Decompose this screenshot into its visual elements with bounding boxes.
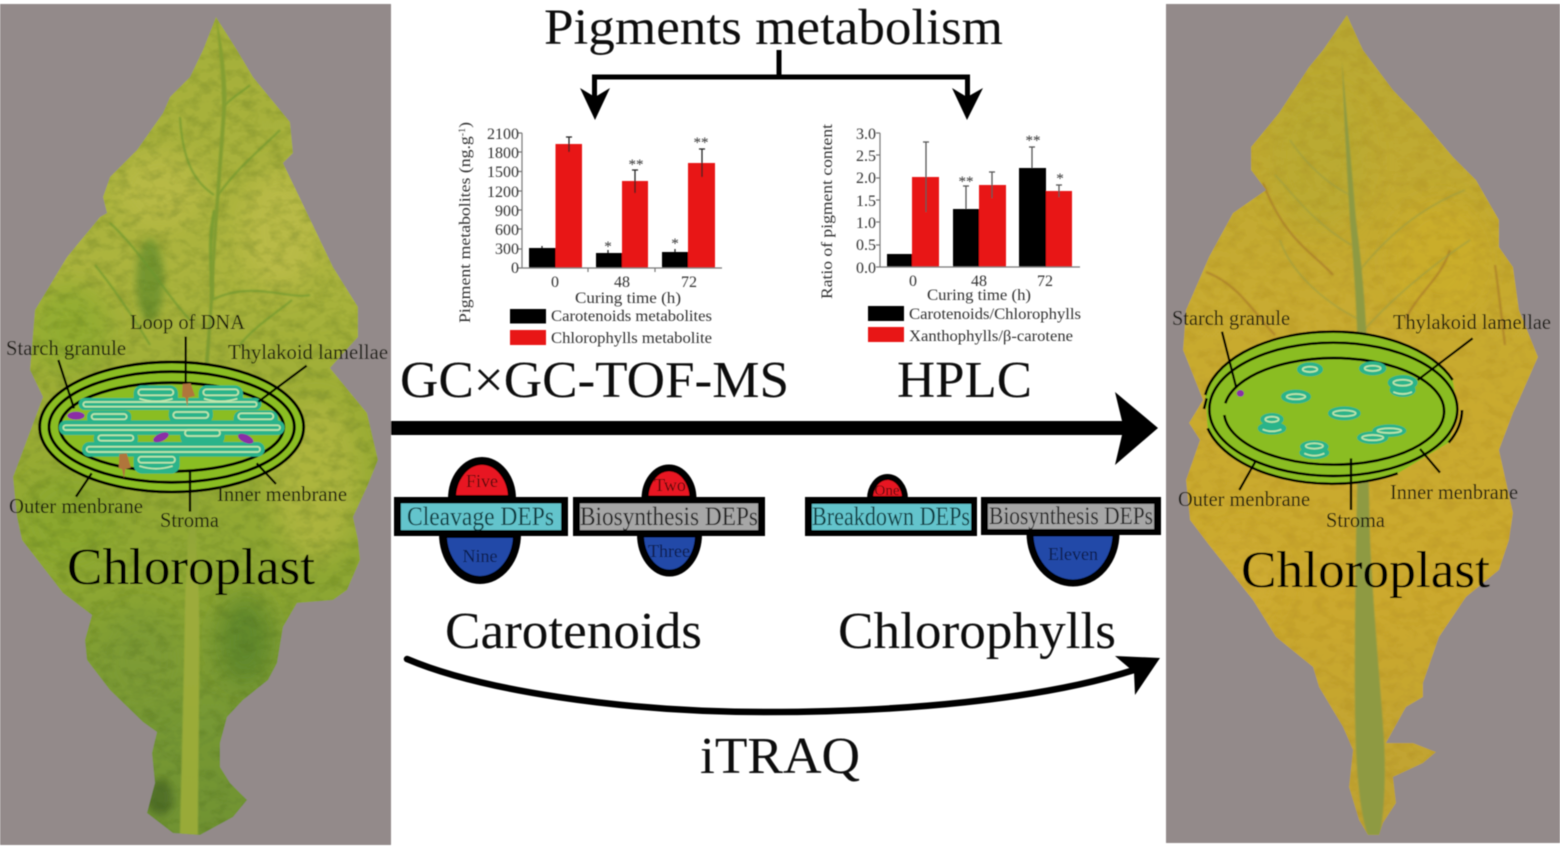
y axis values xyxy=(487,126,519,277)
y axis values: 600 xyxy=(495,222,519,239)
group: carotenoid biosynthesis DEPs xyxy=(573,468,765,573)
panel: cured leaf xyxy=(1160,4,1560,845)
x axis values xyxy=(909,273,1053,290)
axis title x: Curing time (h) xyxy=(927,287,1031,304)
chloroplast labels: Loop of DNA xyxy=(130,310,246,334)
significance marks: ** xyxy=(694,135,708,151)
method label: HPLC: HPLC xyxy=(897,352,1032,409)
chloroplast labels cured: Outer menbrane xyxy=(1178,487,1310,511)
heading: chloroplast right: Chloroplast xyxy=(1241,542,1491,599)
label: cleavage DEPs: Cleavage DEPs xyxy=(407,502,554,531)
y axis values: 0 xyxy=(511,260,519,277)
x axis values: 72 xyxy=(1037,273,1053,290)
method label: GC×GC-TOF-MS: GC×GC-TOF-MS xyxy=(400,352,789,409)
arrow: iTRAQ curved arrow xyxy=(407,656,1160,712)
chloroplast labels: Outer menbrane xyxy=(9,494,143,518)
group: chlorophyll biosynthesis DEPs xyxy=(981,497,1161,583)
chloroplast labels cured xyxy=(1172,306,1551,532)
label: biosynthesis DEPs: Biosynthesis DEPs xyxy=(580,502,758,531)
diagram: chloroplast cured xyxy=(1204,332,1473,510)
y axis values: 900 xyxy=(495,203,519,220)
y axis values: 1500 xyxy=(487,164,519,181)
x axis values: 48 xyxy=(971,273,987,290)
bars xyxy=(887,168,1072,267)
axis title y: -1 xyxy=(457,128,467,136)
axes xyxy=(876,133,1080,267)
count: one xyxy=(870,477,905,499)
count: two: Two xyxy=(654,475,686,495)
chloroplast labels cured: Stroma xyxy=(1326,508,1386,532)
axis title y: ) xyxy=(457,122,474,128)
icon: yellow leaf xyxy=(1182,15,1538,836)
label: breakdown DEPs: Breakdown DEPs xyxy=(812,502,970,531)
legend xyxy=(510,308,712,347)
label: breakdown DEPs xyxy=(805,497,977,536)
error bars xyxy=(923,142,1062,212)
y axis values: 2.0 xyxy=(856,170,876,187)
arrow: main curing arrow xyxy=(391,392,1158,465)
legend xyxy=(868,306,1081,345)
chloroplast labels xyxy=(6,310,388,532)
y axis values: 3.0 xyxy=(856,126,876,143)
diagram: chloroplast xyxy=(40,337,307,512)
x axis values: 48 xyxy=(614,274,630,291)
x axis values: 72 xyxy=(681,274,697,291)
group: carotenoid cleavage DEPs xyxy=(394,461,568,580)
group: chlorophyll breakdown DEPs xyxy=(805,477,977,536)
loops of DNA xyxy=(119,383,195,478)
thylakoid grana xyxy=(1258,362,1417,459)
icon: green leaf xyxy=(0,10,391,845)
y axis values xyxy=(856,126,876,277)
y axis values: 2.5 xyxy=(856,148,876,165)
legend: Xanthophylls/β-carotene xyxy=(909,328,1073,345)
y axis values: 1200 xyxy=(487,184,519,201)
significance marks xyxy=(958,133,1064,190)
chloroplast labels: Stroma xyxy=(160,508,220,532)
label: biosynthesis DEPs xyxy=(573,497,765,536)
significance marks: ** xyxy=(958,174,974,190)
axes xyxy=(518,133,722,272)
count: nine xyxy=(443,534,517,580)
legend: Chlorophylls metabolite xyxy=(551,330,712,347)
label: cleavage DEPs xyxy=(394,497,568,536)
x axis values: 0 xyxy=(551,274,559,291)
significance marks: * xyxy=(671,236,679,252)
starch granule xyxy=(1237,390,1244,397)
thylakoid lamellae xyxy=(60,387,283,472)
axis title x: Curing time (h) xyxy=(575,290,681,307)
starch granules xyxy=(67,412,255,446)
y axis values: 0.5 xyxy=(856,237,876,254)
label: biosynthesis DEPs chlorophyll xyxy=(981,497,1161,535)
axis title y: Ratio of pigment content xyxy=(819,123,836,299)
count: eleven: Eleven xyxy=(1048,544,1098,564)
count: three: Three xyxy=(648,541,690,561)
significance marks: * xyxy=(604,239,612,255)
significance marks: * xyxy=(1056,171,1064,187)
heading: chloroplast left: Chloroplast xyxy=(67,539,316,596)
count: three xyxy=(640,534,698,573)
count: nine: Nine xyxy=(462,546,498,566)
y axis values: 1.5 xyxy=(856,193,876,210)
method label: iTRAQ: iTRAQ xyxy=(700,728,860,785)
y axis values: 0.0 xyxy=(856,260,876,277)
heading: carotenoids: Carotenoids xyxy=(445,603,702,660)
midrib xyxy=(1342,60,1385,835)
y axis values: 1800 xyxy=(487,145,519,162)
panel: fresh leaf xyxy=(0,4,391,845)
chloroplast labels cured: Inner menbrane xyxy=(1390,480,1518,504)
significance marks xyxy=(604,135,708,255)
y axis values: 1.0 xyxy=(856,215,876,232)
x axis values xyxy=(551,274,697,291)
count: five xyxy=(452,461,512,499)
chloroplast labels: Inner menbrane xyxy=(217,482,347,506)
heading: chlorophylls: Chlorophylls xyxy=(838,603,1116,660)
legend: Carotenoids metabolites xyxy=(551,308,712,325)
midrib xyxy=(180,17,227,835)
bars xyxy=(529,144,715,268)
chloroplast labels cured: Thylakoid lamellae xyxy=(1393,310,1551,334)
significance marks: ** xyxy=(1026,133,1040,149)
bar chart: pigment content ratio xyxy=(819,123,1081,345)
count: eleven xyxy=(1030,533,1116,583)
arrow: pigments metabolism split xyxy=(580,50,983,120)
bar chart: pigment metabolites xyxy=(457,122,722,347)
axis title y: Pigment metabolites (ng.g xyxy=(457,155,474,323)
chloroplast labels: Starch granule xyxy=(6,336,126,360)
count: one: One xyxy=(874,483,900,499)
chloroplast labels: Thylakoid lamellae xyxy=(228,340,388,364)
count: two xyxy=(645,468,693,499)
leader lines xyxy=(1222,332,1473,510)
significance marks: ** xyxy=(628,157,644,173)
x axis values: 0 xyxy=(909,273,917,290)
error bars xyxy=(542,137,705,253)
title: Pigments metabolism xyxy=(544,0,1003,56)
count: five: Five xyxy=(466,471,498,491)
y axis values: 2100 xyxy=(487,126,519,143)
label: biosynthesis DEPs chlorophyll: Biosynthesis DEPs xyxy=(989,503,1153,530)
legend: Carotenoids/Chlorophylls xyxy=(909,306,1081,323)
y axis values: 300 xyxy=(495,241,519,258)
chloroplast labels cured: Starch granule xyxy=(1172,306,1290,330)
veins xyxy=(1206,183,1505,345)
leader lines xyxy=(58,337,307,512)
